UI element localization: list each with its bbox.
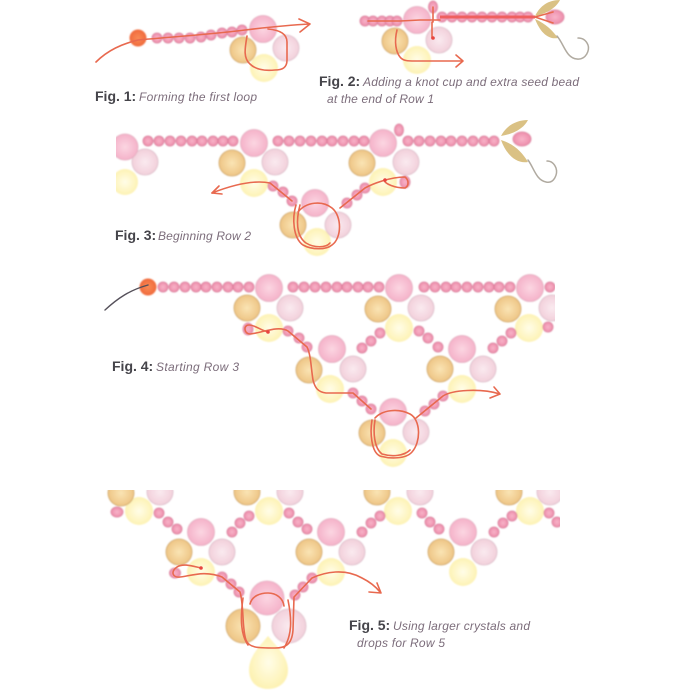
figure 1 caption: Fig. 1: (95, 88, 136, 104)
figure 1 thread and arrow (96, 19, 310, 70)
panel: figure 4 (105, 274, 565, 467)
figure 2 caption: at the end of Row 1 (327, 92, 434, 106)
panel: figure 3 (112, 120, 557, 256)
icon: knot cup and hook (501, 120, 557, 182)
figure 4 tail thread (105, 285, 148, 310)
figure 5 caption: Using larger crystals and (393, 619, 530, 633)
figure 2 beads (360, 1, 564, 74)
figure 4 beads (140, 274, 565, 467)
figure 3 caption: Fig. 3: (115, 227, 156, 243)
large crystals and drop for row 5 (226, 581, 306, 689)
figure 1 beads (130, 16, 299, 82)
panel: figure 2 (319, 0, 589, 106)
figure 5 caption: Fig. 5: (349, 617, 390, 633)
panel: figure 1 (95, 16, 310, 104)
figure 4 caption: Starting Row 3 (156, 360, 239, 374)
figure 2 caption: Adding a knot cup and extra seed bead (362, 75, 579, 89)
figure 5 thread and arrow (173, 565, 381, 648)
icon: knot cup and hook (535, 0, 589, 59)
figure 5 caption: drops for Row 5 (357, 636, 445, 650)
figure 5 beads (108, 479, 563, 600)
figure 2 caption: Fig. 2: (319, 73, 360, 89)
figure 3 thread and arrow (212, 177, 408, 249)
figure 4 caption: Fig. 4: (112, 358, 153, 374)
figure 4 thread and arrow (245, 325, 500, 458)
figure 2 thread and arrow (368, 7, 553, 67)
figure 3 caption: Beginning Row 2 (158, 229, 251, 243)
figure 3 beads (112, 124, 531, 256)
figure 1 caption: Forming the first loop (139, 90, 257, 104)
panel: figure 5 (108, 479, 563, 689)
